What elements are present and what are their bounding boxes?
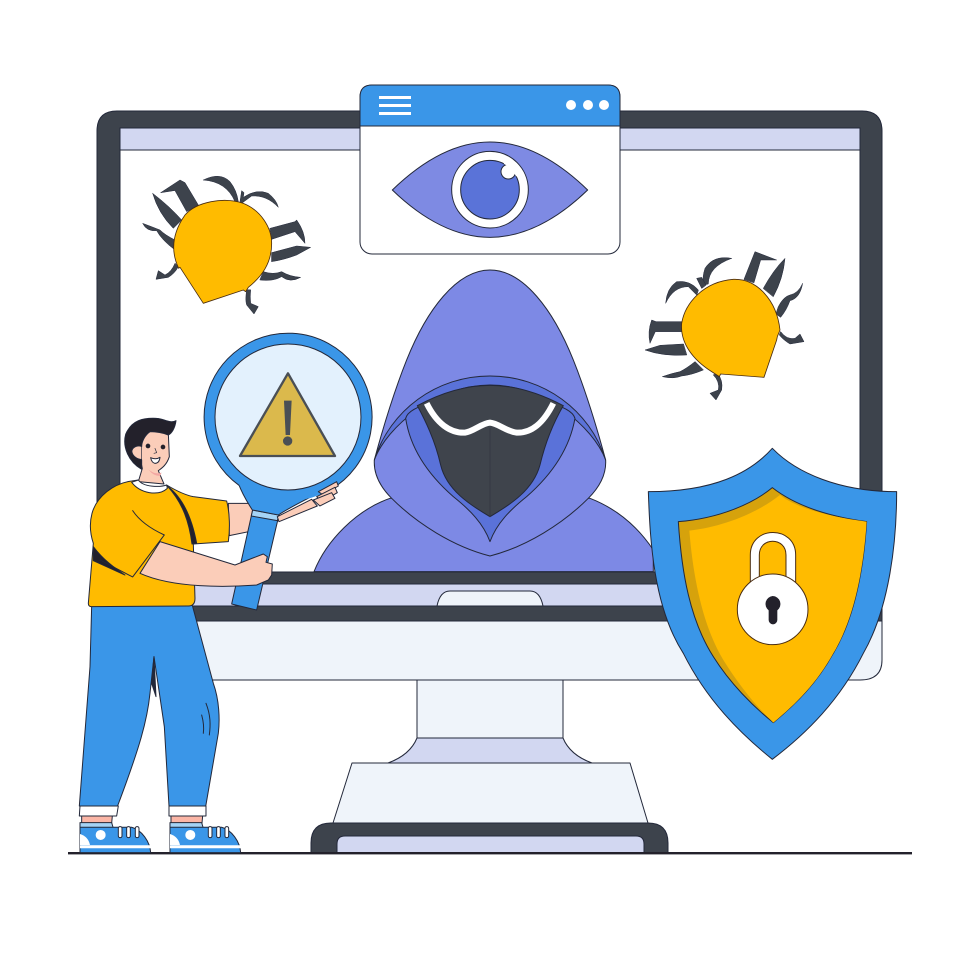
shield with padlock — [648, 448, 897, 759]
window dots — [566, 100, 609, 110]
keyhole — [765, 596, 780, 624]
front arm and hand — [140, 542, 272, 586]
browser window with eye — [360, 85, 620, 254]
left shoe — [80, 827, 151, 853]
shirt — [88, 480, 229, 607]
hood — [374, 270, 606, 556]
hood inner lining — [374, 376, 606, 460]
icon: eye — [392, 142, 588, 237]
fingers on lens — [313, 482, 338, 506]
bug left — [143, 176, 311, 314]
hacker in hood — [314, 270, 653, 572]
magnifier — [204, 333, 372, 610]
bag strap — [167, 486, 197, 544]
man holding magnifier — [79, 333, 372, 853]
sleeve — [93, 511, 164, 577]
hair — [125, 418, 176, 469]
right shoe — [170, 827, 241, 853]
padlock — [737, 532, 808, 645]
trousers — [79, 605, 219, 807]
warning triangle — [240, 373, 335, 456]
shirt collar — [132, 480, 167, 493]
menu icon — [379, 96, 411, 115]
cuffs and ankles — [79, 806, 206, 828]
back arm — [228, 503, 257, 536]
goggle strip — [427, 403, 553, 433]
shield bright face — [689, 495, 867, 723]
bug right — [645, 252, 804, 400]
mask seam — [488, 428, 491, 517]
mask — [417, 385, 563, 517]
monitor — [97, 111, 882, 853]
shoulders — [314, 498, 653, 572]
face details — [132, 444, 165, 476]
forearm to lens — [277, 499, 317, 522]
ground line — [68, 852, 912, 854]
neck and face — [137, 430, 169, 484]
